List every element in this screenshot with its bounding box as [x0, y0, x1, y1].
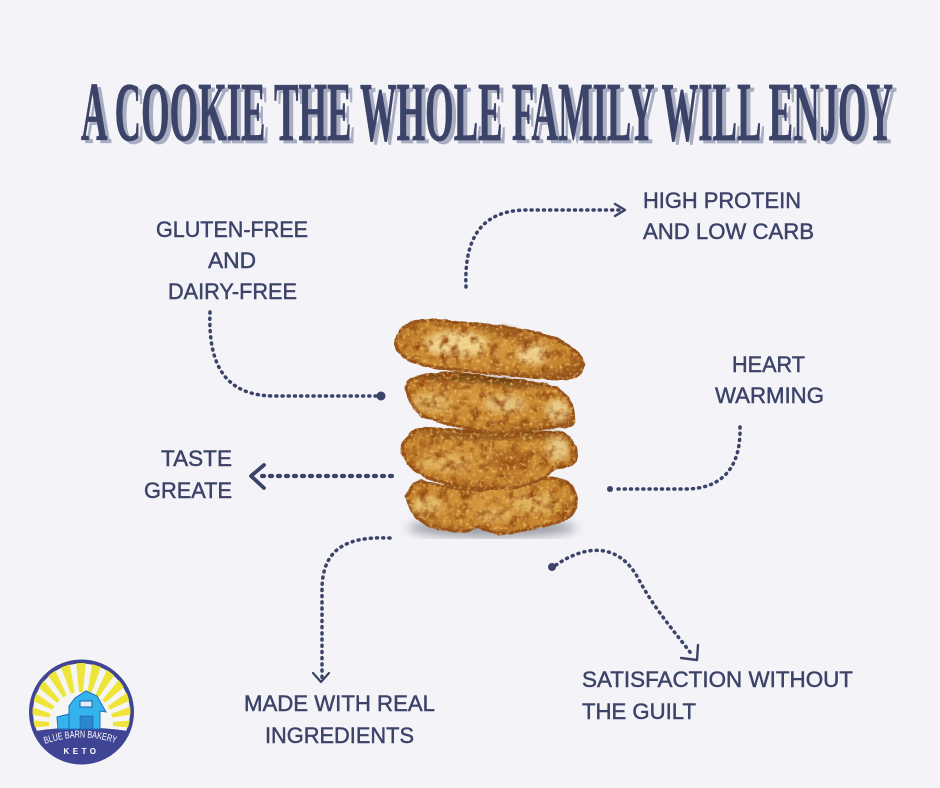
label: gluten-free and dairy-free: DAIRY-FREE	[168, 279, 297, 304]
arrow: to high protein	[466, 204, 625, 287]
logo barn	[57, 691, 106, 729]
label: taste greate: TASTE	[161, 446, 232, 471]
arrow: to real ingredients	[313, 538, 390, 682]
label: satisfaction without the guilt: SATISFACTION WITHOUT	[582, 667, 853, 692]
label: gluten-free and dairy-free	[156, 217, 308, 304]
label: taste greate: GREATE	[144, 478, 232, 503]
logo lower band	[35, 728, 128, 762]
label: made with real ingredients: MADE WITH REAL	[244, 691, 435, 716]
cookie 2	[406, 373, 574, 433]
cookie 4	[407, 478, 577, 534]
logo: Blue Barn Bakery Keto: KETO	[63, 747, 100, 756]
label: high protein and low carb	[643, 188, 814, 244]
cookie stack photo	[396, 320, 583, 537]
label: gluten-free and dairy-free: AND	[208, 248, 256, 273]
arrow: to satisfaction	[548, 550, 698, 660]
arrow: from gluten-free	[210, 312, 386, 400]
cookie shadow	[408, 519, 576, 537]
label: heart warming: HEART	[732, 352, 805, 377]
arrow: from heart warming	[607, 427, 740, 492]
label: made with real ingredients	[244, 691, 435, 748]
logo sun rays	[32, 663, 130, 728]
label: heart warming: WARMING	[715, 383, 824, 408]
cookie 1	[396, 320, 583, 379]
label: high protein and low carb: AND LOW CARB	[643, 219, 814, 244]
label: satisfaction without the guilt: THE GUILT	[582, 699, 696, 724]
cookie 3	[402, 428, 577, 489]
label: made with real ingredients: INGREDIENTS	[265, 723, 414, 748]
logo: Blue Barn Bakery Keto	[29, 660, 134, 764]
arrow: to taste greate	[251, 465, 392, 488]
label: gluten-free and dairy-free: GLUTEN-FREE	[156, 217, 308, 242]
label: taste greate	[144, 446, 232, 503]
label: high protein and low carb: HIGH PROTEIN	[643, 188, 801, 213]
label: heart warming	[715, 352, 824, 408]
logo disc	[31, 662, 132, 762]
label: satisfaction without the guilt	[582, 667, 853, 724]
logo text: BLUE BARN BAKERY	[43, 730, 118, 744]
